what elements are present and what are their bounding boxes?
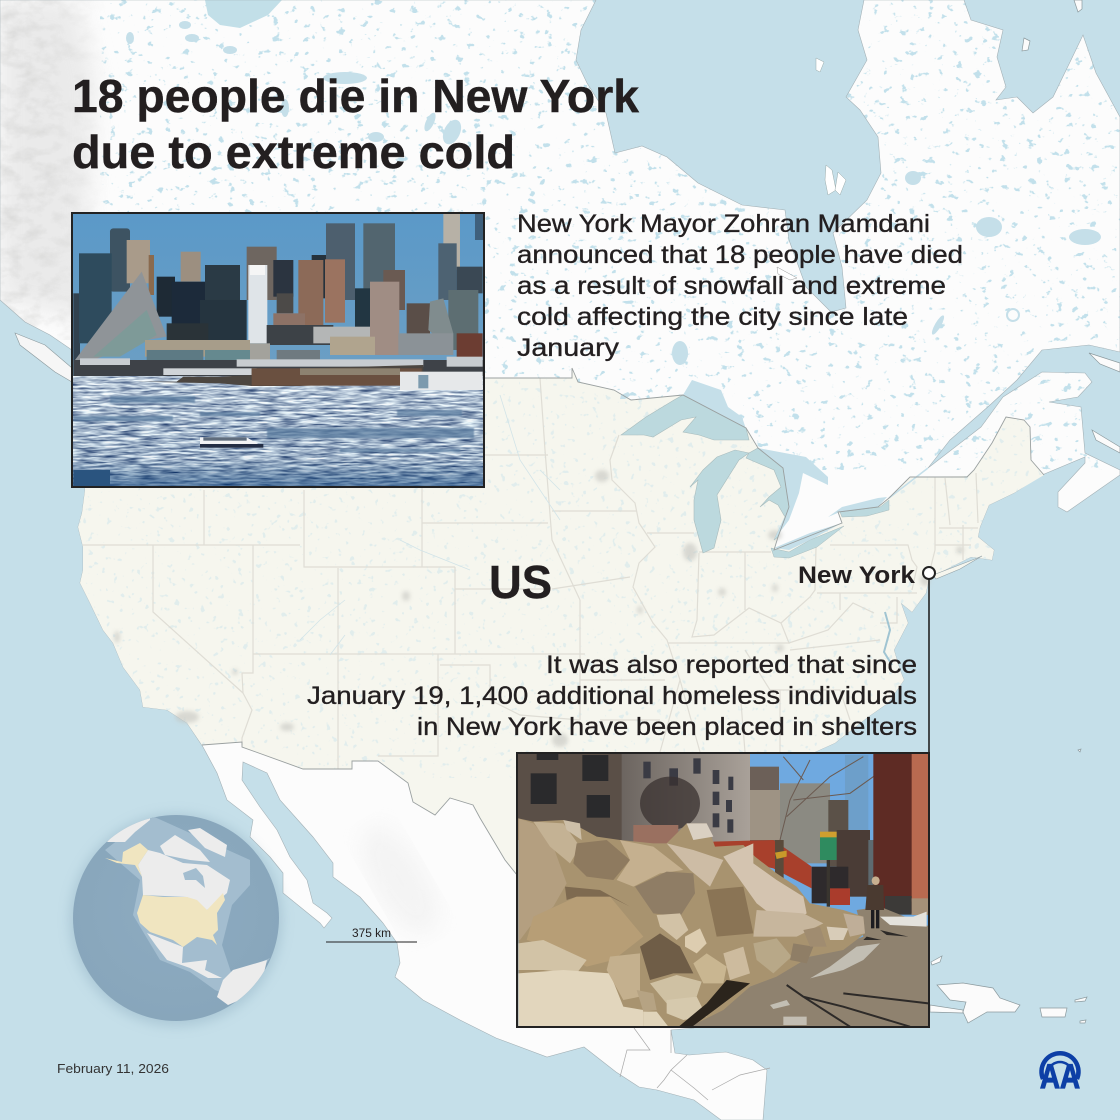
scale bar — [326, 928, 417, 942]
globe locator — [70, 814, 282, 1026]
text block: homeless shelter report: It was also reported that since — [546, 651, 917, 679]
date: February 11, 2026 — [57, 1061, 169, 1076]
map: Vancouver Island — [15, 333, 72, 382]
title: due to extreme cold — [72, 126, 515, 178]
logo: Anadolu Agency: AA — [1040, 1058, 1080, 1096]
map: state borders — [83, 378, 978, 769]
map: Chesapeake Bay — [884, 612, 892, 665]
globe: northern land — [107, 815, 267, 1005]
title: 18 people die in New York — [72, 70, 639, 122]
text block: mayor announcement: as a result of snowfall and extreme — [517, 272, 946, 300]
country label: US: US — [489, 556, 552, 608]
map: contiguous US — [70, 368, 1050, 900]
title — [72, 70, 639, 178]
text block: mayor announcement — [517, 210, 963, 362]
globe: highlighted contiguous US — [137, 893, 225, 947]
globe: Hudson Bay — [183, 868, 205, 888]
map: Caribbean islands — [930, 0, 1120, 1023]
text block: mayor announcement: cold affecting the city since late — [517, 303, 908, 331]
marker: New York — [923, 567, 935, 579]
text block: mayor announcement: New York Mayor Zohran Mamdani — [517, 210, 930, 238]
photo: frozen Hudson River and Manhattan skyline — [72, 213, 484, 487]
text block: homeless shelter report: January 19, 1,400 additional homeless individuals — [307, 682, 917, 710]
text block: mayor announcement: January — [517, 334, 620, 362]
text block: homeless shelter report: in New York have been placed in shelters — [417, 713, 917, 741]
map: rivers — [300, 395, 560, 655]
connector line: New York to lower photo — [928, 579, 930, 754]
text block: homeless shelter report — [307, 651, 917, 741]
photo: snow piles on Manhattan sidewalk — [517, 753, 930, 1030]
text block: mayor announcement: announced that 18 people have died — [517, 241, 963, 269]
map: Hudson Bay islands — [816, 58, 846, 195]
map: US-Canada and US-Mexico borders — [202, 368, 1044, 875]
city label: New York: New York — [798, 562, 916, 589]
globe: Alaska — [105, 843, 148, 877]
map: urban grey blobs — [114, 470, 964, 747]
map: Long Island — [933, 556, 982, 579]
map: Great Lakes — [620, 380, 928, 558]
globe: continental shelf — [105, 815, 270, 1000]
map: Central America borders — [620, 1028, 770, 1100]
scale bar: 375 km — [352, 928, 391, 940]
